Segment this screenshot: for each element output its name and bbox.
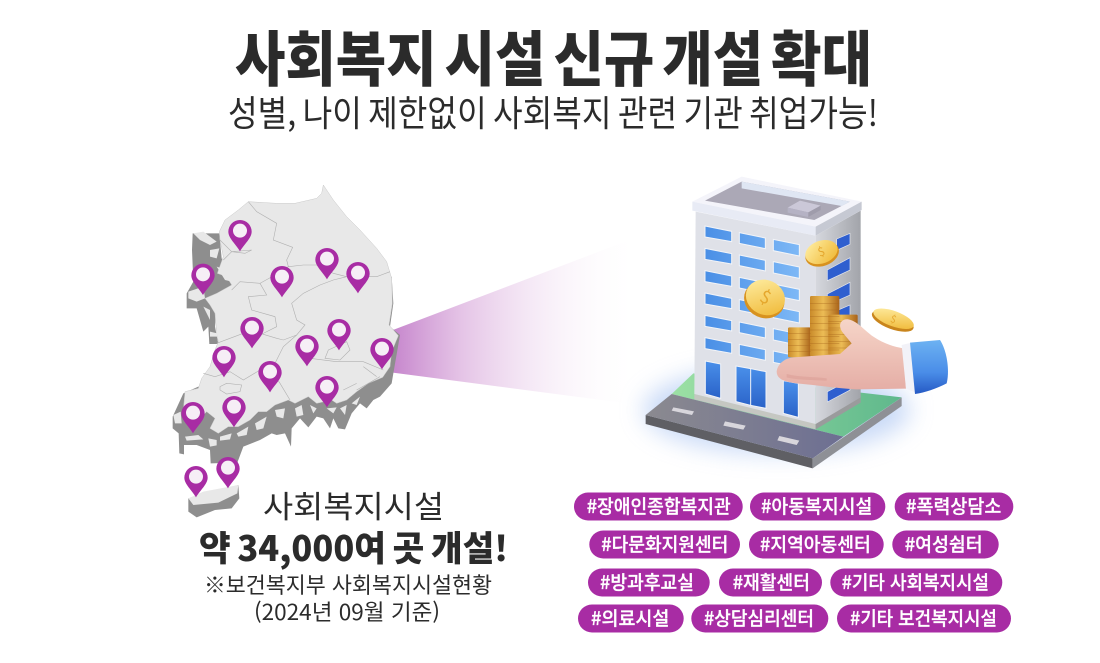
- map top face: [183, 185, 398, 433]
- pill: 폭력상담소: #폭력상담소: [906, 492, 1001, 519]
- pin 14: [181, 402, 205, 433]
- location pins: [181, 220, 394, 497]
- heading: 사회복지시설: [263, 482, 444, 527]
- doors: [705, 361, 798, 417]
- map of South Korea: [173, 185, 400, 517]
- main figure: 약 34,000여 곳 개설!: [199, 521, 508, 572]
- pill: 재활센터: #재활센터: [733, 568, 810, 595]
- pin 7: [327, 319, 351, 350]
- date note: (2024년 09월 기준): [254, 595, 440, 627]
- pin 2: [191, 264, 215, 295]
- statistic text block: [199, 482, 508, 627]
- side windows: [827, 233, 850, 402]
- Jeju island: [188, 485, 239, 517]
- pin 3: [270, 266, 294, 297]
- flying coins: [738, 235, 917, 336]
- pill: 기타 사회복지시설: #기타 사회복지시설: [842, 568, 989, 595]
- pin 12: [315, 376, 339, 407]
- subtitle: 성별, 나이 제한없이 사회복지 관련 기관 취업가능!: [228, 85, 878, 137]
- pin 1: [228, 220, 252, 251]
- illustration: building with coins and hand: [643, 177, 948, 468]
- building: [692, 177, 862, 429]
- map extrusion: [173, 233, 400, 463]
- title: 사회복지 시설 신규 개설 확대: [235, 12, 872, 99]
- roof: [692, 177, 862, 227]
- coast islands: [173, 232, 360, 447]
- pin 15: [184, 466, 208, 497]
- map region borders: [203, 202, 390, 400]
- roof vent: [788, 201, 821, 212]
- flying coins: $: [756, 283, 776, 310]
- pin 11: [258, 361, 282, 392]
- pill: 기타 보건복지시설: #기타 보건복지시설: [850, 604, 997, 631]
- pill: 의료시설: #의료시설: [591, 604, 669, 631]
- pill: 방과후교실: #방과후교실: [600, 568, 694, 595]
- pin 8: [295, 335, 319, 366]
- blue glow: [643, 367, 910, 453]
- pill: 지역아동센터: #지역아동센터: [760, 530, 871, 557]
- pin 10: [370, 338, 394, 369]
- pill: 상담심리센터: #상담심리센터: [704, 604, 814, 631]
- hand: [777, 319, 948, 394]
- source: ※보건복지부 사회복지시설현황: [204, 568, 492, 600]
- pin 6: [240, 317, 264, 348]
- front windows: [705, 226, 799, 368]
- pill: 여성쉼터: #여성쉼터: [905, 530, 983, 557]
- ground platform: [646, 373, 902, 468]
- pin 13: [222, 396, 246, 427]
- pill: 다문화지원센터: #다문화지원센터: [601, 530, 728, 557]
- pin 16: [216, 457, 240, 488]
- pill: 아동복지시설: #아동복지시설: [761, 492, 872, 519]
- hashtag pills: [574, 492, 1013, 632]
- pin 5: [346, 262, 370, 293]
- pin 9: [212, 346, 236, 377]
- flying coins: $: [889, 310, 899, 326]
- coin stacks: [788, 296, 858, 357]
- pill: 장애인종합복지관: #장애인종합복지관: [587, 492, 731, 519]
- pin 4: [315, 248, 339, 279]
- light beam from map to building: [385, 236, 640, 405]
- flying coins: $: [815, 242, 827, 261]
